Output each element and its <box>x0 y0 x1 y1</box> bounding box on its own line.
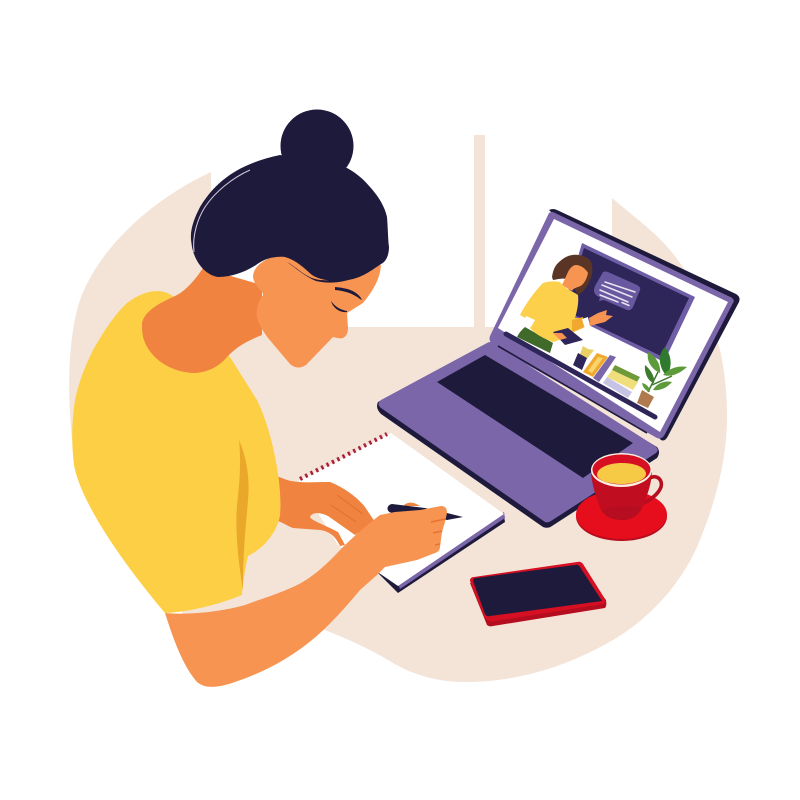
eyebrow <box>335 287 362 300</box>
left hand <box>270 474 375 546</box>
notebook spiral rings <box>300 434 387 479</box>
background blob with window <box>69 135 727 682</box>
speech bubble <box>594 272 640 310</box>
teacher sweater <box>520 281 583 342</box>
phone <box>470 562 606 626</box>
teacher pointing hand <box>589 310 613 326</box>
hair <box>191 110 389 281</box>
blackboard on screen <box>562 243 695 362</box>
books and pencil cup <box>573 346 640 398</box>
laptop base <box>377 342 659 528</box>
tablet <box>553 328 583 345</box>
laptop screen lid <box>490 209 740 440</box>
teacher on screen <box>517 255 613 353</box>
shirt crease <box>236 440 249 590</box>
tea <box>597 463 646 484</box>
teacher hair <box>552 255 592 295</box>
cup rim <box>591 453 652 487</box>
keyboard <box>437 355 633 478</box>
neck <box>142 268 262 373</box>
teacher face <box>562 265 588 291</box>
notebook <box>298 433 505 593</box>
shelf <box>506 334 655 417</box>
shirt <box>72 291 280 613</box>
saucer <box>576 492 667 541</box>
cup handle <box>642 477 661 504</box>
coffee cup and saucer <box>576 453 667 541</box>
closed eye <box>331 301 347 312</box>
knuckle creases <box>331 495 363 522</box>
potted plant <box>637 347 687 408</box>
hair strand <box>287 262 358 283</box>
woman <box>72 110 463 687</box>
right arm and hand <box>165 506 447 687</box>
finger creases <box>431 519 445 545</box>
teacher skirt <box>517 327 553 353</box>
face <box>253 240 381 368</box>
laptop <box>377 209 740 528</box>
cup body <box>591 472 652 520</box>
pen <box>388 503 463 520</box>
